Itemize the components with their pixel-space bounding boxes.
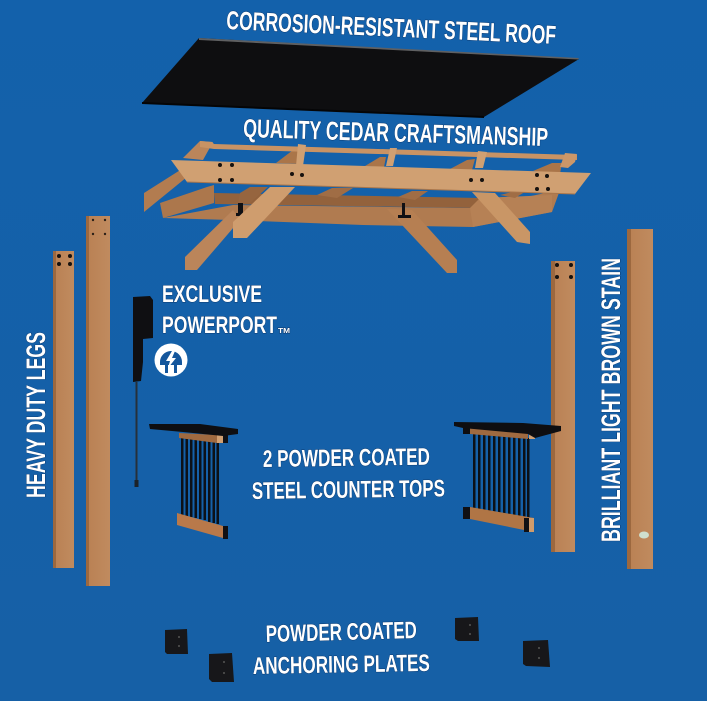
label: exclusive powerport: TM	[278, 328, 290, 335]
lower beam front face	[163, 190, 560, 227]
heading: steel roof: CORROSION-RESISTANT STEEL ROOF	[226, 5, 557, 50]
leg: far left	[53, 251, 74, 568]
label: counter tops	[252, 444, 445, 505]
outer left rafter	[144, 167, 187, 212]
upper rafters	[276, 147, 306, 164]
left counter top	[149, 424, 238, 539]
front diagonal right	[472, 192, 530, 244]
lower beam top face	[214, 193, 480, 208]
front beam	[171, 160, 591, 194]
cross rafters	[238, 187, 268, 203]
label: exclusive powerport	[162, 281, 290, 339]
cedar frame	[144, 141, 591, 273]
brackets	[236, 203, 247, 216]
label: counter tops: 2 POWDER COATED	[263, 444, 430, 473]
left lower block	[160, 185, 214, 218]
anchor plate 1	[165, 629, 188, 654]
right lower beam	[470, 195, 552, 227]
label: exclusive powerport: POWERPORT	[162, 312, 277, 339]
anchor plate 4	[523, 640, 550, 667]
label: heavy duty legs: HEAVY DUTY LEGS	[21, 332, 51, 498]
back rail	[200, 141, 577, 160]
heading: cedar: QUALITY CEDAR CRAFTSMANSHIP	[243, 113, 549, 152]
right counter top	[454, 422, 561, 532]
bolt holes	[218, 163, 550, 191]
icon: power plug	[154, 344, 188, 376]
label: light brown stain: BRILLIANT LIGHT BROWN STAIN	[596, 258, 626, 542]
leg: far right	[627, 229, 653, 569]
anchor plate 2	[209, 653, 234, 682]
powerport device	[133, 296, 153, 487]
roof panel	[142, 38, 579, 118]
label: anchoring plates	[253, 617, 430, 680]
anchor plate 3	[455, 617, 479, 641]
label: anchoring plates: ANCHORING PLATES	[253, 650, 430, 680]
long diagonal centre	[387, 209, 457, 273]
label: exclusive powerport: EXCLUSIVE	[162, 281, 262, 308]
label: anchoring plates: POWDER COATED	[265, 617, 417, 648]
leg: inner left	[86, 216, 110, 586]
front diagonal left	[233, 187, 295, 238]
leg: inner right	[551, 261, 575, 552]
label: counter tops: STEEL COUNTER TOPS	[252, 475, 445, 505]
long diagonal left	[185, 210, 240, 270]
